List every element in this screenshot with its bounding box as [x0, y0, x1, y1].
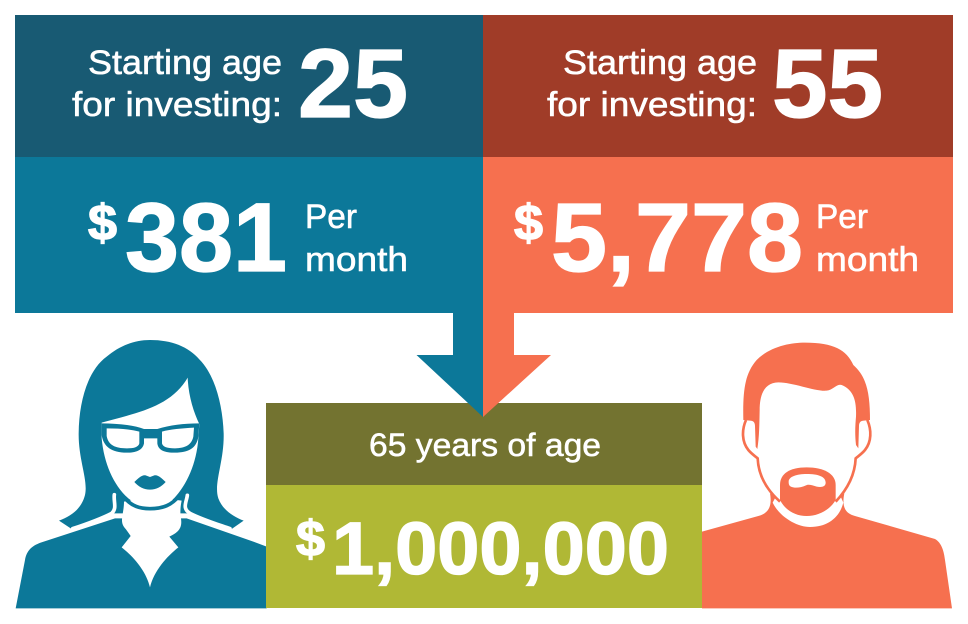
text: per month	[305, 198, 408, 279]
collar	[773, 495, 843, 527]
text: per month: Per	[816, 198, 868, 236]
text: starting age label: for investing:	[72, 86, 282, 124]
number: 5,778 dollars: 5,778	[551, 183, 803, 292]
text: starting age label: Starting age	[563, 44, 757, 82]
ears and jaw	[743, 420, 780, 502]
text: per month	[816, 198, 919, 279]
panel: age 55 header	[483, 15, 953, 157]
number: 5,778 dollars: $	[514, 195, 543, 251]
text: per month: month	[816, 241, 919, 279]
text: starting age label: Starting age	[88, 44, 282, 82]
neck and blouse	[122, 497, 182, 587]
glasses	[102, 423, 199, 453]
text: starting age label: for investing:	[547, 86, 757, 124]
lips	[134, 475, 166, 490]
panel: 65 years of age: 65 years of age	[369, 427, 601, 463]
white collar lines	[73, 495, 115, 529]
icon: woman investor	[16, 340, 267, 608]
panel: 5,778 per month	[483, 157, 953, 313]
panel: 381 per month	[15, 157, 483, 313]
chin line	[123, 496, 179, 509]
panel: 65 years of age	[266, 403, 702, 485]
panel: 1,000,000 total	[266, 485, 702, 608]
panel: age 25 header	[15, 15, 483, 157]
mouth	[789, 474, 826, 488]
text: per month: Per	[305, 198, 357, 236]
number: 381 dollars: 381	[125, 183, 287, 292]
arrow: orange	[483, 313, 551, 417]
hair and sideburns	[743, 343, 870, 449]
icon: man investor	[702, 343, 952, 608]
number: 55: 55	[772, 29, 883, 138]
arrow: teal	[416, 313, 483, 417]
text: starting age label	[72, 44, 282, 124]
face	[102, 378, 199, 505]
panel: 1,000,000 total: $	[296, 511, 325, 567]
number: 381 dollars: $	[88, 195, 117, 251]
beard	[780, 467, 836, 516]
number: 25: 25	[298, 29, 408, 138]
panel: 1,000,000 total: 1,000,000	[332, 507, 669, 590]
text: per month: month	[305, 241, 408, 279]
text: starting age label	[547, 44, 757, 124]
